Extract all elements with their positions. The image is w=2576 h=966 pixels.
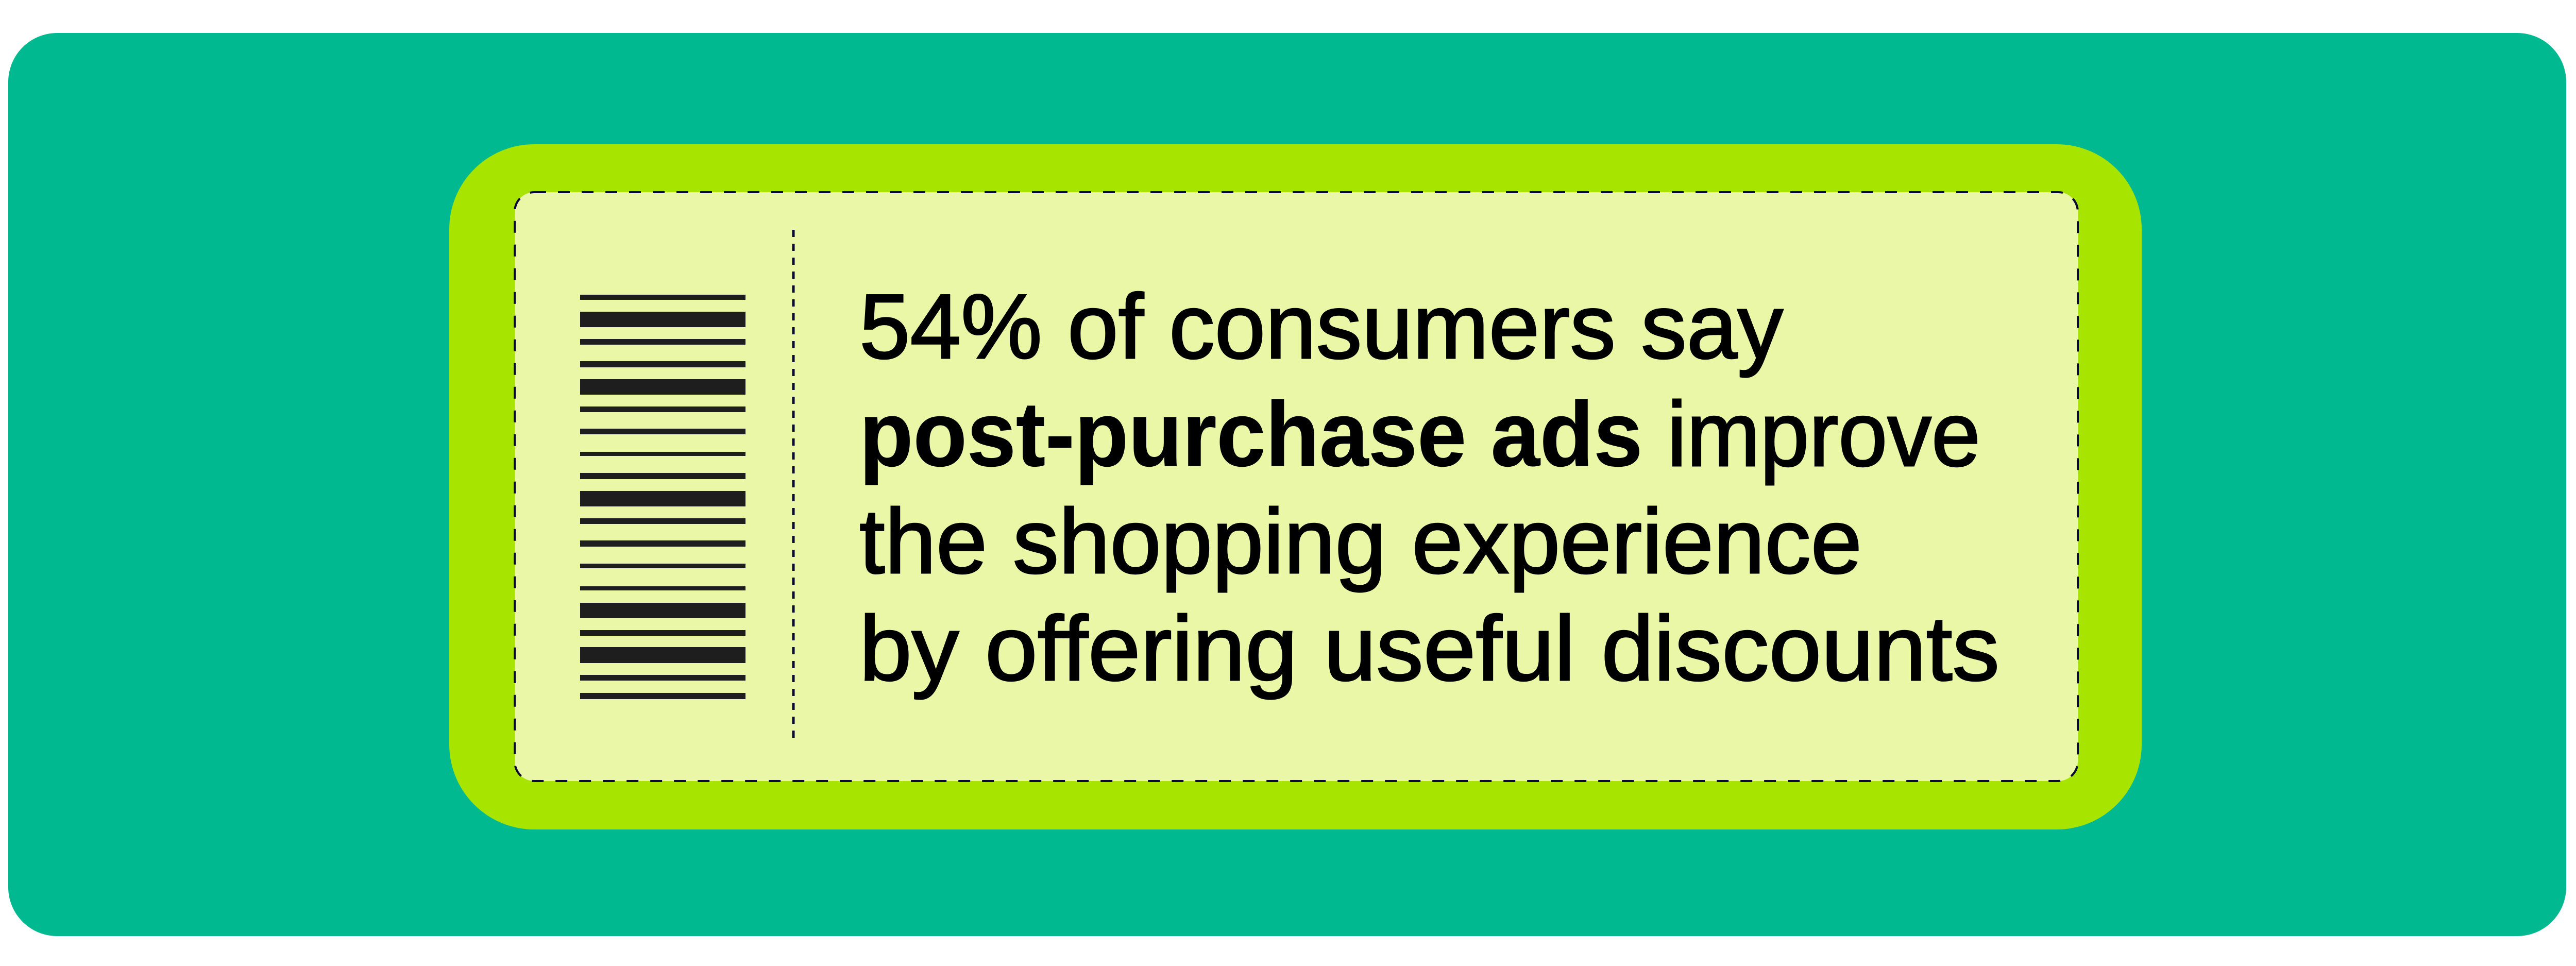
ticket inner panel — [515, 192, 2078, 781]
ticket — [449, 144, 2142, 829]
statistic text: the shopping experience — [859, 490, 1862, 592]
perforation line — [792, 230, 794, 742]
statistic text — [859, 275, 1999, 700]
statistic text: 54% of consumers say — [859, 275, 1783, 378]
ticket outer frame — [449, 144, 2142, 829]
statistic text: post-purchase ads improve — [859, 383, 1980, 485]
icon: barcode — [580, 295, 745, 699]
statistic text: by offering useful discounts — [859, 597, 1999, 700]
